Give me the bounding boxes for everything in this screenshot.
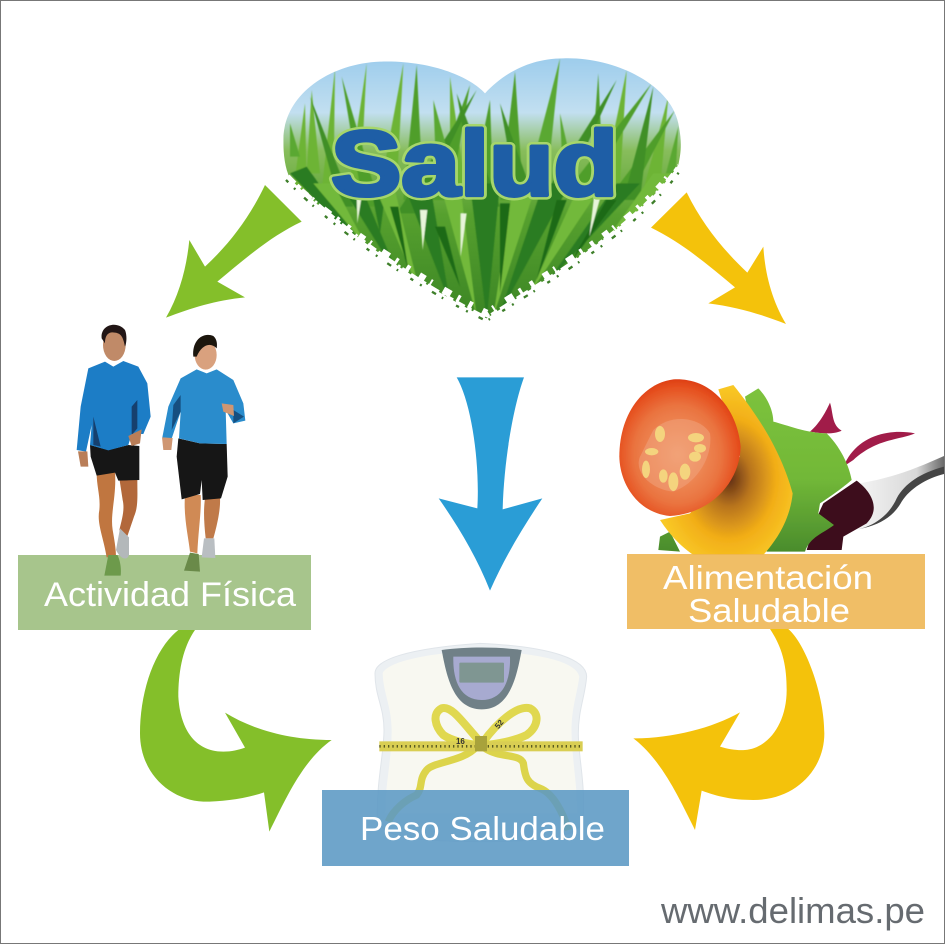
label: Alimentación Saludable: Saludable: [688, 592, 850, 629]
man far leg: [119, 478, 137, 538]
label: Actividad Física: Actividad Física: [44, 576, 296, 614]
label: Peso Saludable: [322, 790, 629, 866]
LCD: [459, 663, 504, 683]
arrow: blue, centre: [439, 377, 542, 591]
tomato pulp: [639, 419, 710, 492]
label: Alimentación Saludable: [627, 554, 925, 629]
measuring tape: 16: [456, 737, 465, 746]
display panel: [453, 657, 510, 700]
arrow: green, top left: [166, 185, 302, 318]
label: Peso Saludable: Peso Saludable: [360, 810, 605, 847]
fork: [853, 456, 944, 529]
woman hair: [193, 335, 217, 357]
yellow pepper: [660, 385, 793, 555]
website url: www.delimas.pe: [660, 890, 925, 931]
scale display housing: [442, 647, 522, 709]
arrow: yellow, top right: [651, 192, 786, 324]
dark radicchio: [807, 481, 874, 550]
woman far shoe: [202, 538, 215, 558]
photo: salad on fork: [619, 379, 944, 555]
woman near leg: [185, 495, 201, 553]
red leaves: [810, 403, 915, 467]
woman sweater: [162, 369, 245, 444]
woman near shoe: [184, 553, 200, 572]
label: Alimentación Saludable: Alimentación: [663, 559, 873, 596]
man head: [103, 329, 126, 361]
photo: runners: [77, 325, 245, 576]
man sweater shade: [93, 400, 137, 447]
photo: bathroom scale with tape: [375, 643, 587, 842]
man far shoe: [116, 528, 129, 559]
scale platform: [383, 651, 579, 813]
lettuce: [658, 388, 852, 552]
woman head: [195, 340, 217, 370]
torn lower edge of heart: [286, 166, 682, 321]
curved arrow: yellow: [633, 629, 824, 830]
woman shorts: [177, 438, 228, 500]
title: Salud: Salud: [331, 113, 618, 215]
curved arrow: green: [140, 630, 332, 832]
fork shadow: [858, 467, 944, 529]
man near shoe: [104, 555, 121, 576]
tomato seeds: [642, 426, 706, 491]
man shorts: [90, 445, 139, 481]
woman far leg: [204, 498, 220, 538]
heart of grass: [277, 53, 687, 323]
man hair: [102, 325, 126, 347]
tomato: [619, 379, 741, 516]
woman hands: [162, 403, 234, 450]
man near leg: [97, 472, 116, 557]
woman sweater shade: [172, 395, 244, 430]
measuring tape: 52: [493, 718, 506, 731]
label: Actividad Física: [18, 555, 311, 630]
measuring tape: [379, 708, 583, 830]
man sweater: [77, 361, 151, 452]
title: Salud: Salud: [331, 113, 618, 215]
scale body: [375, 643, 587, 842]
man hands: [78, 429, 142, 467]
